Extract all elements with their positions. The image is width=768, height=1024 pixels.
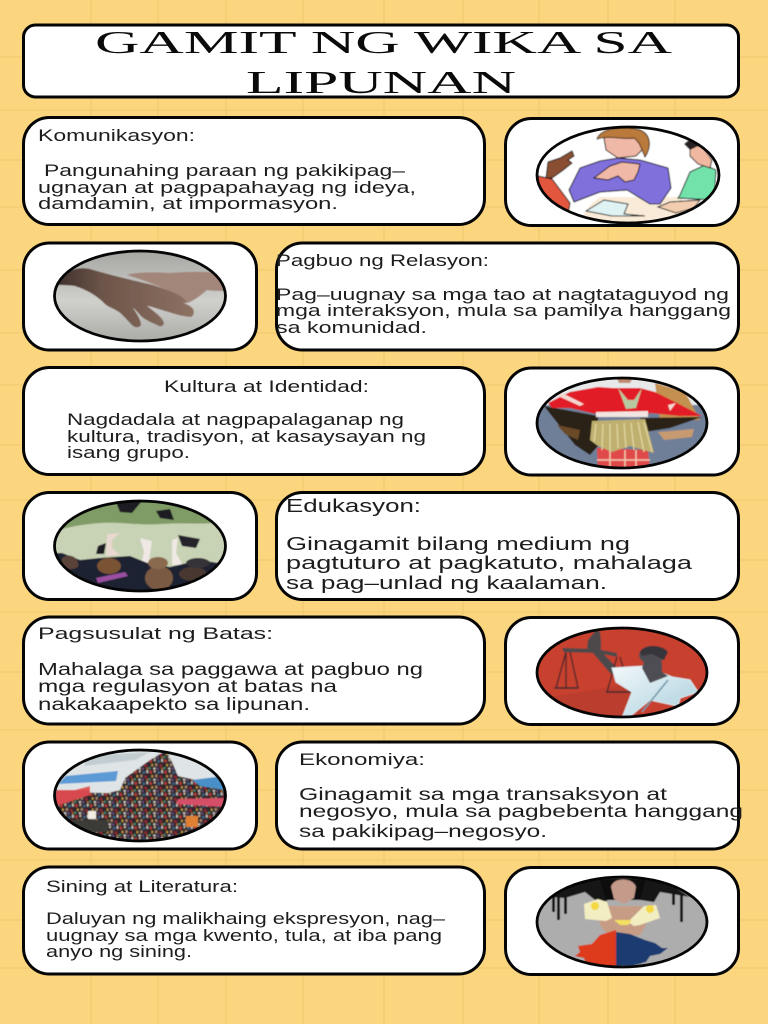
panel: Edukasyon image bbox=[24, 492, 256, 600]
text block: Edukasyon: Ginagamit bilang medium ng bbox=[286, 533, 630, 554]
icon: clasped hands bbox=[50, 248, 230, 344]
panel: Komunikasyon text bbox=[24, 118, 484, 224]
panel: Sining at Literatura text bbox=[24, 867, 484, 974]
panel: Ekonomiya text bbox=[276, 742, 743, 849]
text block: Sining at Literatura bbox=[46, 910, 446, 961]
text block: Pagsusulat ng Batas bbox=[38, 659, 423, 714]
text block: Komunikasyon: damdamin, at impormasyon. bbox=[38, 195, 338, 213]
text block: Edukasyon: pagtuturo at pagkatuto, mahalaga bbox=[286, 552, 693, 573]
icon: graduates throwing caps bbox=[50, 498, 230, 594]
title: LIPUNAN bbox=[246, 64, 516, 100]
title bbox=[95, 24, 672, 100]
panel: Edukasyon text bbox=[276, 492, 738, 600]
heading: Edukasyon: Edukasyon: bbox=[286, 495, 421, 516]
text block: Sining at Literatura: uugnay sa mga kwento, tula, at iba pang bbox=[46, 927, 442, 945]
heading: Sining at Literatura: Sining at Literatura: bbox=[46, 878, 238, 896]
icon: dancer in traditional costume bbox=[530, 375, 715, 471]
icon: lady justice with scales bbox=[536, 626, 708, 718]
text block: Komunikasyon: ugnayan at pagpapahayag ng ideya, bbox=[38, 179, 416, 197]
text block: Pagbuo ng Relasyon bbox=[276, 286, 731, 337]
heading: Kultura at Identidad: Kultura at Identidad: bbox=[164, 378, 369, 396]
panel: Pagbuo ng Relasyon text bbox=[276, 243, 738, 350]
text block: Pagsusulat ng Batas: nakakaapekto sa lipunan. bbox=[38, 694, 310, 714]
heading: Pagbuo ng Relasyon: Pagbuo ng Relasyon: bbox=[276, 252, 489, 270]
panel: Ekonomiya image bbox=[24, 742, 256, 849]
icon: people talking at a table bbox=[536, 126, 720, 224]
panel: Pagbuo ng Relasyon image bbox=[24, 243, 256, 350]
text block: Ekonomiya bbox=[299, 784, 743, 841]
text block: Edukasyon: sa pag–unlad ng kaalaman. bbox=[286, 572, 607, 593]
text block: Pagbuo ng Relasyon: mga interaksyon, mula sa pamilya hanggang bbox=[276, 302, 731, 320]
text block: Ekonomiya: negosyo, mula sa pagbebenta hanggang bbox=[299, 801, 743, 821]
text block: Pagsusulat ng Batas: Mahalaga sa paggawa at pagbuo ng bbox=[38, 659, 423, 679]
text block: Kultura at Identidad: Nagdadala at nagpapalaganap ng bbox=[67, 411, 404, 429]
text block: Kultura at Identidad bbox=[67, 411, 426, 462]
panel: Komunikasyon image bbox=[506, 118, 738, 230]
title: GAMIT NG WIKA SA bbox=[95, 24, 672, 60]
text block: Kultura at Identidad: kultura, tradisyon, at kasaysayan ng bbox=[67, 428, 426, 446]
text block: Kultura at Identidad: isang grupo. bbox=[67, 444, 190, 462]
panel: Kultura at Identidad image bbox=[506, 368, 738, 475]
icon: woman in Filipiniana with flag colours bbox=[536, 876, 708, 968]
panel: Pagsusulat ng Batas image bbox=[506, 618, 738, 724]
text block: Sining at Literatura: Daluyan ng malikhaing ekspresyon, nag– bbox=[46, 910, 446, 928]
text block: Edukasyon bbox=[286, 533, 693, 593]
heading: Komunikasyon: Komunikasyon: bbox=[38, 127, 195, 145]
title panel bbox=[24, 24, 738, 100]
panel: Kultura at Identidad text bbox=[24, 368, 484, 474]
panel: Sining at Literatura image bbox=[506, 868, 738, 974]
text block: Ekonomiya: Ginagamit sa mga transaksyon at bbox=[299, 784, 667, 804]
text block: Pagsusulat ng Batas: mga regulasyon at batas na bbox=[38, 676, 337, 696]
icon: crowded street market bbox=[50, 748, 230, 844]
heading: Pagsusulat ng Batas: Pagsusulat ng Batas: bbox=[38, 625, 273, 643]
heading: Ekonomiya: Ekonomiya: bbox=[299, 751, 425, 769]
text block: Pagbuo ng Relasyon: Pag–uugnay sa mga tao at nagtataguyod ng bbox=[276, 286, 729, 304]
text block: Ekonomiya: sa pakikipag–negosyo. bbox=[299, 821, 547, 841]
panel: Pagsusulat ng Batas text bbox=[24, 617, 484, 724]
text block: Sining at Literatura: anyo ng sining. bbox=[46, 943, 192, 961]
text block: Komunikasyon bbox=[38, 162, 416, 213]
text block: Komunikasyon: Pangunahing paraan ng pakikipag– bbox=[44, 162, 406, 180]
text block: Pagbuo ng Relasyon: sa komunidad. bbox=[276, 319, 427, 337]
